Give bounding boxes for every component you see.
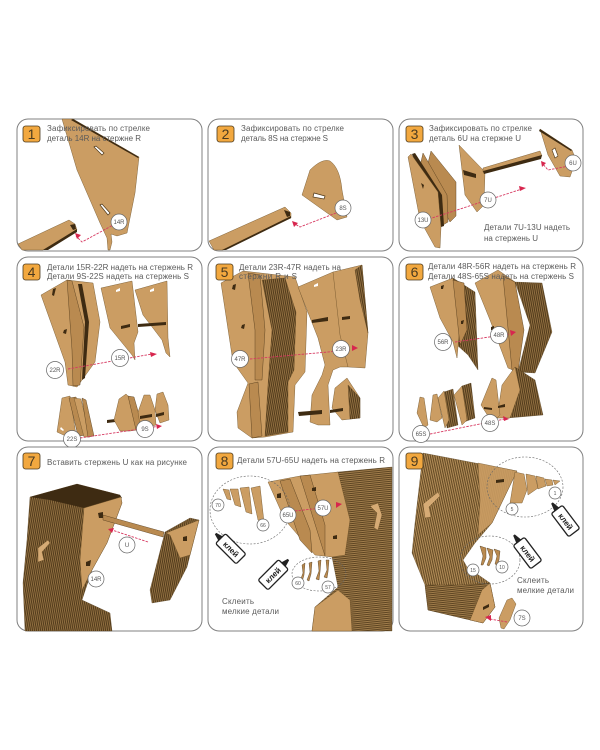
rod U — [103, 515, 164, 537]
label 65U — [280, 507, 296, 523]
label 56R — [434, 334, 452, 350]
cone pieces — [510, 472, 560, 503]
label 65S — [412, 426, 430, 442]
part right 23R — [333, 265, 368, 368]
label 48R: 48R — [493, 333, 505, 339]
panel 1 — [17, 119, 202, 251]
instruction text: Зафиксировать по стрелке — [429, 124, 533, 133]
rod R — [18, 220, 77, 250]
head assembly — [23, 484, 122, 631]
label 57 — [322, 581, 334, 593]
head — [412, 453, 517, 623]
stack 22S — [57, 396, 94, 438]
step number 8 — [216, 453, 233, 469]
label 13U: 13U — [417, 218, 429, 224]
note: мелкие детали — [222, 607, 279, 616]
label 7U: 7U — [484, 198, 492, 204]
label 15: 15 — [470, 568, 476, 574]
label 8S — [335, 200, 351, 216]
arrow — [75, 224, 115, 242]
stack 47R — [221, 271, 307, 438]
label 5 — [506, 503, 518, 515]
step number 9 — [406, 453, 423, 469]
label 57U — [315, 500, 331, 516]
step number 6 — [406, 264, 423, 280]
part 7U with rod — [459, 145, 542, 212]
glue bottle top — [211, 529, 246, 564]
instruction text: Вставить стержень U как на рисунке — [47, 458, 188, 467]
part 23R — [298, 272, 352, 425]
instruction text: Детали 48R-56R надеть на стержень R — [428, 262, 576, 271]
glue bottle left — [508, 531, 542, 569]
arrow — [292, 213, 336, 227]
panel 4 — [17, 257, 202, 448]
arrow — [108, 528, 148, 542]
label 13U — [415, 212, 431, 228]
rod S — [209, 207, 291, 250]
label 15R — [112, 350, 128, 366]
step number 1 — [23, 126, 40, 142]
arrows — [429, 161, 569, 219]
label 10: 10 — [499, 565, 505, 571]
label 6U: 6U — [569, 161, 577, 167]
label 23R — [332, 340, 350, 358]
label 60 — [292, 577, 304, 589]
note: мелкие детали — [517, 586, 574, 595]
label 48R — [490, 326, 508, 344]
panel 2 — [208, 119, 393, 251]
step number 7 — [23, 453, 40, 469]
instruction text: Детали 15R-22R надеть на стержень R — [47, 263, 193, 272]
label 66: 66 — [260, 523, 266, 529]
step number 2: 2 — [222, 126, 230, 142]
part 8S — [302, 160, 347, 220]
label 57U: 57U — [317, 506, 329, 512]
step number 4 — [23, 264, 40, 280]
panel 9 — [399, 447, 583, 631]
panel 8 — [208, 447, 393, 631]
step number 4: 4 — [28, 264, 36, 280]
label 70: 70 — [215, 503, 221, 509]
group 9S — [107, 392, 169, 431]
label 5: 5 — [511, 507, 514, 513]
note: Детали 7U-13U надеть — [484, 223, 570, 232]
label 15 — [467, 564, 479, 576]
small pieces 65S — [417, 383, 475, 428]
panel 3 — [399, 119, 583, 251]
label 65U: 65U — [282, 513, 294, 519]
label 70 — [212, 499, 224, 511]
step number 3 — [406, 126, 423, 142]
label 22S — [64, 430, 80, 448]
label 7S — [514, 610, 530, 626]
back piece — [150, 518, 199, 603]
glue bottle right: клей — [556, 512, 575, 532]
part 9R with rod — [135, 281, 170, 357]
panel 6 — [399, 257, 583, 442]
small cone pieces — [223, 486, 264, 522]
label U — [119, 537, 135, 553]
label 1 — [549, 487, 561, 499]
label 47R — [232, 350, 248, 368]
dashed groups — [460, 457, 563, 584]
label 47R: 47R — [234, 357, 246, 363]
arrow — [250, 345, 358, 359]
instruction text: Детали 48S-65S надеть на стержень S — [428, 272, 574, 281]
label U: U — [125, 543, 129, 549]
label 14R — [88, 571, 104, 587]
plates 13U — [408, 151, 456, 248]
step number 9: 9 — [411, 453, 419, 469]
step number 8: 8 — [221, 453, 229, 469]
part 14R — [62, 119, 139, 250]
label 15R: 15R — [114, 356, 126, 362]
label 57: 57 — [325, 585, 331, 591]
dashed groups — [210, 476, 346, 591]
glue bottle left: клей — [518, 544, 537, 564]
label 66 — [257, 519, 269, 531]
instruction text: Детали 57U-65U надеть на стержень R — [237, 456, 385, 465]
instruction text: деталь 14R на стержне R — [47, 134, 141, 143]
lower piece with rods — [298, 378, 360, 420]
arrow — [485, 615, 507, 622]
instruction text: стержни R и S — [239, 272, 297, 281]
label 8S: 8S — [339, 206, 347, 212]
arrows — [430, 330, 516, 434]
panel 7 — [17, 447, 202, 631]
label 9S: 9S — [141, 427, 149, 433]
part 15R — [101, 281, 138, 360]
stack 48R — [475, 270, 552, 373]
instruction text: Зафиксировать по стрелке — [47, 124, 151, 133]
label 9S — [136, 420, 154, 438]
small detail pieces — [300, 560, 329, 582]
glue bottle bottom — [258, 555, 293, 590]
glue bottle bottom: клей — [264, 566, 283, 585]
label 22S: 22S — [67, 437, 77, 443]
step number 7: 7 — [28, 453, 36, 469]
arrow — [295, 502, 342, 511]
step number 2 — [217, 126, 234, 142]
label 7U — [480, 192, 496, 208]
label 14R: 14R — [113, 220, 125, 226]
stack 56R — [430, 278, 478, 370]
lower group 48S — [481, 367, 543, 420]
stack 22R — [41, 280, 100, 387]
arrows — [68, 352, 162, 438]
label 14R: 14R — [90, 577, 102, 583]
instruction text: Детали 23R-47R надеть на — [239, 263, 342, 272]
step number 6: 6 — [411, 264, 419, 280]
panel 5 — [208, 257, 393, 441]
label 7S: 7S — [518, 616, 526, 622]
note: Склеить — [222, 597, 254, 606]
step number 5 — [216, 264, 233, 280]
note: на стержень U — [484, 234, 538, 243]
instruction text: Зафиксировать по стрелке — [241, 124, 345, 133]
glue bottle right — [546, 499, 580, 537]
note: Склеить — [517, 576, 549, 585]
step number 1: 1 — [28, 126, 36, 142]
small detail pieces — [480, 546, 500, 566]
label 48S: 48S — [485, 421, 495, 427]
label 23R: 23R — [335, 347, 347, 353]
label 22R: 22R — [49, 368, 61, 374]
instruction text: деталь 6U на стержне U — [429, 134, 521, 143]
label 65S: 65S — [416, 432, 426, 438]
glue bottle top: клей — [221, 540, 241, 559]
part 7S — [499, 598, 516, 629]
label 22R — [46, 362, 64, 378]
head — [268, 467, 392, 631]
label 10 — [496, 561, 508, 573]
label 56R: 56R — [437, 340, 449, 346]
step number 3: 3 — [411, 126, 419, 142]
label 6U — [565, 155, 581, 171]
step number 5: 5 — [221, 264, 229, 280]
label 60: 60 — [295, 581, 301, 587]
instruction text: деталь 8S на стержне S — [241, 134, 328, 143]
label 1: 1 — [554, 491, 557, 497]
label 14R — [111, 214, 127, 230]
instruction text: Детали 9S-22S надеть на стержень S — [47, 272, 189, 281]
part 6U — [539, 129, 576, 177]
label 48S — [482, 414, 498, 432]
